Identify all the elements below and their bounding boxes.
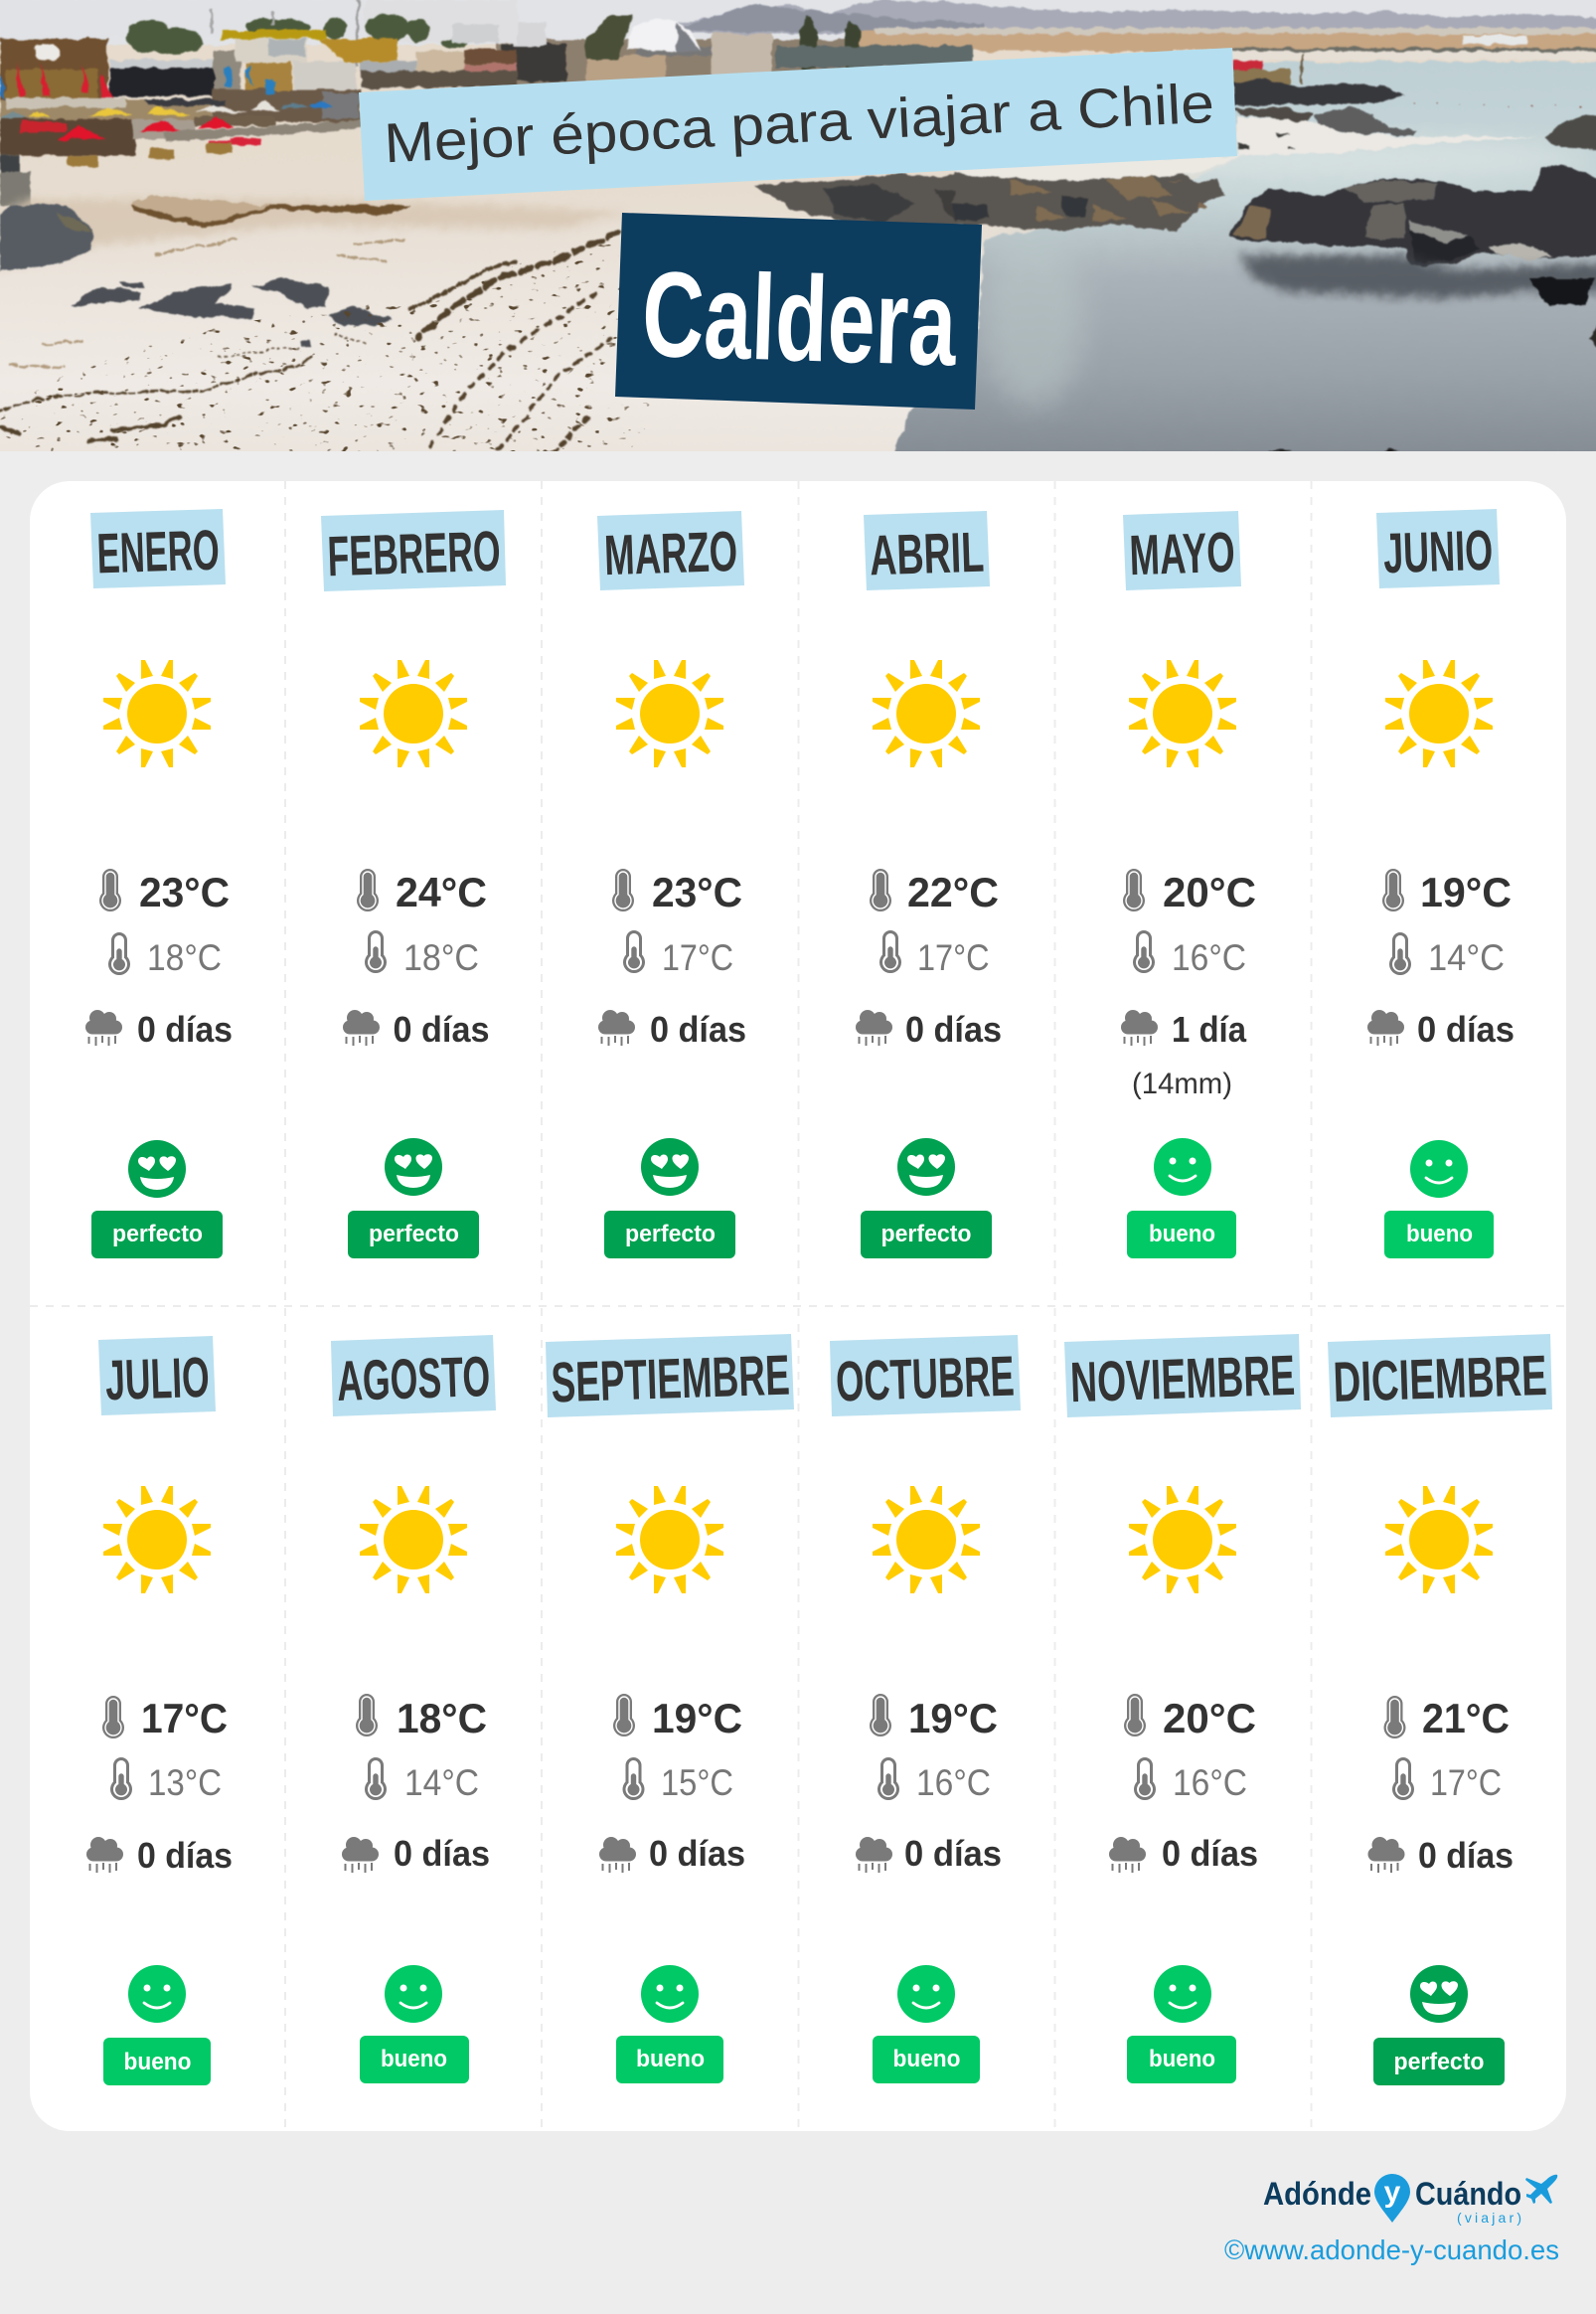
rating: perfecto bbox=[861, 1138, 992, 1258]
max temperature: 20°C bbox=[1163, 869, 1256, 915]
month: Febrero bbox=[321, 510, 506, 1258]
min temperature: 16°C bbox=[916, 1762, 991, 1803]
rating: bueno: bueno bbox=[892, 2046, 960, 2072]
rating: bueno: bueno bbox=[381, 2046, 447, 2072]
icon: sun bbox=[873, 660, 980, 767]
rain days bbox=[1367, 1835, 1514, 1876]
rain days: 1 día bbox=[1172, 1009, 1247, 1050]
rating: bueno: bueno bbox=[636, 2046, 705, 2072]
icon: sun bbox=[360, 1486, 467, 1593]
month: Abril bbox=[856, 511, 1002, 1258]
icon: sun bbox=[616, 1486, 723, 1593]
min temperature bbox=[878, 1757, 991, 1803]
min temperature bbox=[879, 930, 990, 978]
icon: map pin bbox=[1374, 2174, 1410, 2223]
min temperature bbox=[365, 1757, 479, 1803]
logo: Adónde y Cuándo viajar: (viajar) bbox=[1457, 2210, 1521, 2226]
rain days bbox=[85, 1009, 233, 1050]
heading: Octubre bbox=[830, 1335, 1021, 1416]
min temperature: 16°C bbox=[1172, 937, 1246, 978]
heading: Marzo bbox=[597, 511, 744, 590]
rating: perfecto bbox=[1373, 1965, 1505, 2085]
rain days: 0 días bbox=[904, 1833, 1002, 1874]
heading: Mayo: MAYO bbox=[1129, 521, 1236, 587]
rating: bueno: bueno bbox=[123, 2049, 191, 2075]
icon: sun bbox=[1385, 660, 1493, 767]
min temperature bbox=[622, 1757, 733, 1803]
icon: sun bbox=[616, 660, 723, 767]
rain days: 0 días bbox=[1417, 1009, 1515, 1050]
rain days: 0 días bbox=[1162, 1833, 1258, 1874]
month: Mayo bbox=[1121, 511, 1256, 1258]
max temperature bbox=[1124, 1694, 1256, 1741]
month: Marzo bbox=[597, 511, 746, 1258]
min temperature: 17°C bbox=[917, 937, 990, 978]
month: Octubre bbox=[830, 1335, 1021, 2083]
max temperature bbox=[102, 1695, 228, 1741]
max temperature bbox=[612, 869, 742, 915]
heading: Junio: JUNIO bbox=[1382, 519, 1494, 585]
min temperature bbox=[110, 1757, 222, 1803]
max temperature: 24°C bbox=[396, 869, 487, 915]
max temperature bbox=[356, 1694, 487, 1741]
max temperature: 21°C bbox=[1422, 1695, 1510, 1741]
logo: Adónde y Cuándo viajar: Cuándo bbox=[1415, 2176, 1521, 2212]
heading: Febrero bbox=[321, 510, 506, 591]
heading: Enero bbox=[90, 509, 226, 588]
rain days: 0 días bbox=[394, 1009, 489, 1050]
rain days: 0 días bbox=[137, 1835, 233, 1876]
rating: bueno bbox=[1127, 1965, 1236, 2083]
min temperature bbox=[623, 930, 733, 978]
rating: bueno bbox=[103, 1965, 211, 2085]
rating: bueno bbox=[616, 1965, 723, 2083]
heading: Junio bbox=[1376, 509, 1500, 588]
min temperature: 14°C bbox=[1428, 937, 1505, 978]
panel: months calendar card bbox=[30, 481, 1566, 2131]
title banner: Mejor época para viajar a Chile bbox=[359, 48, 1237, 201]
max temperature: 20°C bbox=[1163, 1695, 1256, 1741]
icon: sun bbox=[103, 1486, 211, 1593]
rain days: 0 días bbox=[1418, 1835, 1514, 1876]
min temperature bbox=[1389, 932, 1505, 978]
min temperature: 13°C bbox=[148, 1762, 222, 1803]
rain days bbox=[1121, 1009, 1247, 1050]
heading: Marzo: MARZO bbox=[603, 520, 738, 587]
rating: perfecto: perfecto bbox=[880, 1221, 972, 1247]
month: Junio bbox=[1367, 509, 1515, 1258]
month: Agosto bbox=[331, 1335, 496, 2083]
heading: Abril bbox=[864, 511, 990, 590]
heading: Septiembre bbox=[546, 1334, 794, 1417]
rating: perfecto: perfecto bbox=[1393, 2049, 1485, 2075]
heading: Enero: ENERO bbox=[96, 518, 221, 586]
month: Enero bbox=[85, 509, 233, 1258]
icon: sun bbox=[1129, 660, 1236, 767]
min temperature: 16°C bbox=[1173, 1762, 1247, 1803]
icon: map pin: y bbox=[1384, 2176, 1401, 2209]
heading: Abril: ABRIL bbox=[869, 521, 985, 587]
min temperature bbox=[1392, 1757, 1502, 1803]
rain days bbox=[598, 1009, 746, 1050]
rain days bbox=[342, 1833, 490, 1874]
dark rocks in centre bbox=[755, 174, 1217, 231]
rain days: 0 días bbox=[650, 1009, 746, 1050]
max temperature: 19°C bbox=[1420, 869, 1512, 915]
min temperature bbox=[365, 930, 479, 978]
rain days bbox=[1367, 1009, 1515, 1050]
month: Diciembre bbox=[1328, 1334, 1552, 2085]
rain days: 0 días bbox=[649, 1833, 745, 1874]
max temperature bbox=[870, 869, 999, 915]
rating: perfecto bbox=[348, 1138, 479, 1258]
rating: bueno bbox=[1384, 1140, 1494, 1258]
hero right painted area bbox=[954, 35, 1596, 451]
rating: bueno bbox=[873, 1965, 980, 2083]
rating: perfecto: perfecto bbox=[112, 1221, 203, 1247]
heading: Octubre: OCTUBRE bbox=[835, 1345, 1016, 1413]
seaweed centre bbox=[417, 233, 618, 451]
icon: sun bbox=[103, 660, 211, 767]
rating: bueno: bueno bbox=[1149, 1221, 1215, 1247]
logo: Adónde y Cuándo viajar bbox=[1263, 2174, 1557, 2226]
heading: Agosto bbox=[331, 1335, 496, 1416]
rating: bueno: bueno bbox=[1149, 2046, 1215, 2072]
max temperature bbox=[1382, 869, 1512, 915]
rain days: 0 días bbox=[394, 1833, 490, 1874]
max temperature: 17°C bbox=[141, 1695, 228, 1741]
heading: Julio bbox=[98, 1336, 216, 1415]
min temperature: 17°C bbox=[662, 937, 733, 978]
rain days bbox=[86, 1835, 233, 1876]
month: Septiembre bbox=[546, 1334, 794, 2083]
rain days bbox=[343, 1009, 489, 1050]
heading: Mayo bbox=[1123, 511, 1241, 590]
max temperature bbox=[870, 1694, 998, 1741]
icon: plane bbox=[1525, 2175, 1557, 2204]
rating: bueno bbox=[1127, 1138, 1236, 1258]
max temperature bbox=[357, 869, 487, 915]
max temperature bbox=[613, 1694, 742, 1741]
max temperature: 19°C bbox=[652, 1695, 742, 1741]
rating: bueno bbox=[360, 1965, 469, 2083]
rating: perfecto: perfecto bbox=[369, 1221, 459, 1247]
rainfall amount: (14mm) bbox=[1132, 1068, 1232, 1100]
min temperature bbox=[108, 932, 222, 978]
max temperature bbox=[1383, 1695, 1510, 1741]
rating: perfecto: perfecto bbox=[625, 1221, 716, 1247]
rain days bbox=[856, 1833, 1002, 1874]
rating: perfecto bbox=[604, 1138, 735, 1258]
destination banner: Caldera bbox=[615, 213, 982, 410]
icon: sun bbox=[1385, 1486, 1493, 1593]
heading: Julio: JULIO bbox=[104, 1346, 211, 1412]
min temperature: 17°C bbox=[1430, 1762, 1502, 1803]
icon: sun bbox=[873, 1486, 980, 1593]
rain days bbox=[856, 1009, 1002, 1050]
month: Julio bbox=[86, 1336, 233, 2085]
min temperature bbox=[1133, 930, 1246, 978]
min temperature: 14°C bbox=[404, 1762, 479, 1803]
max temperature: 23°C bbox=[652, 869, 742, 915]
month: Noviembre bbox=[1064, 1334, 1301, 2083]
max temperature: 23°C bbox=[139, 869, 230, 915]
icon: sun bbox=[360, 660, 467, 767]
max temperature: 22°C bbox=[907, 869, 999, 915]
logo: Adónde y Cuándo viajar: Adónde bbox=[1263, 2176, 1371, 2212]
rain days: 0 días bbox=[905, 1009, 1002, 1050]
destination name: Caldera bbox=[640, 247, 959, 391]
rating: bueno: bueno bbox=[1406, 1221, 1473, 1247]
hero left painted area bbox=[0, 0, 629, 440]
rating: perfecto bbox=[91, 1140, 223, 1258]
heading: Noviembre bbox=[1064, 1334, 1301, 1417]
min temperature: 18°C bbox=[147, 937, 222, 978]
max temperature: 18°C bbox=[397, 1695, 487, 1741]
title text: Mejor época para viajar a Chile bbox=[383, 72, 1215, 174]
hero photo: Caldera beach and rocky coast bbox=[0, 0, 1596, 487]
heading: Septiembre: SEPTIEMBRE bbox=[551, 1344, 791, 1414]
max temperature: 19°C bbox=[908, 1695, 998, 1741]
town in middle bbox=[495, 38, 847, 84]
max temperature bbox=[99, 869, 230, 915]
rain days bbox=[1109, 1833, 1258, 1874]
min temperature bbox=[1134, 1757, 1247, 1803]
heading: Febrero: FEBRERO bbox=[327, 520, 502, 588]
rain days bbox=[599, 1833, 745, 1874]
heading: Agosto: AGOSTO bbox=[336, 1345, 491, 1413]
min temperature: 18°C bbox=[403, 937, 479, 978]
min temperature: 15°C bbox=[661, 1762, 733, 1803]
icon: sun bbox=[1129, 1486, 1236, 1593]
rain days: 0 días bbox=[137, 1009, 233, 1050]
heading: Noviembre: NOVIEMBRE bbox=[1069, 1344, 1296, 1414]
website url: ©www.adonde-y-cuando.es bbox=[1224, 2234, 1559, 2265]
